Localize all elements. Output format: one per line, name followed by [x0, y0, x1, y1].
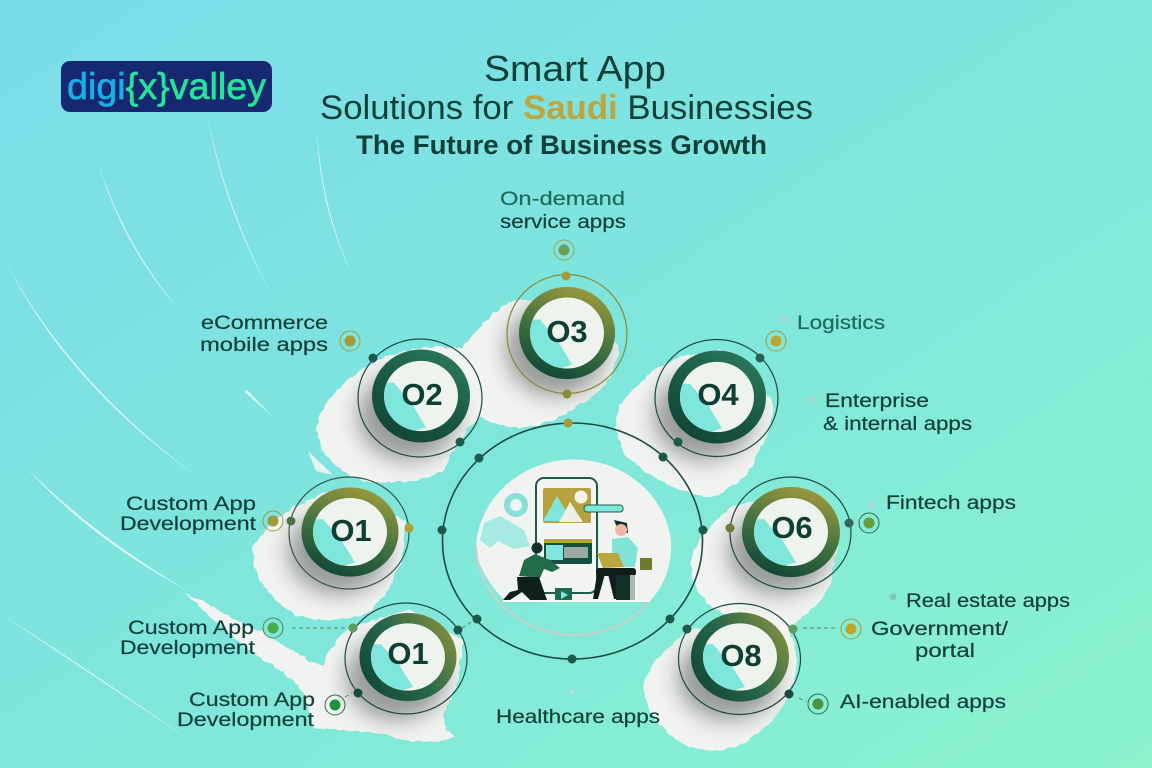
label: custom app development upper: Development: [120, 514, 257, 535]
node 06: [726, 477, 854, 589]
label: eCommerce mobile apps: eCommerce: [201, 313, 328, 334]
node 08: O8: [720, 638, 762, 673]
central illustration: app team: [476, 459, 671, 635]
label: enterprise and internal apps: Enterprise: [825, 391, 929, 412]
label: government portal: Government/: [871, 619, 1009, 640]
label: custom app development middle: Development: [120, 638, 256, 659]
label: logistics: [766, 313, 885, 351]
label: custom app development lower: Custom App: [189, 690, 315, 711]
logo: digi{x}valley: digi{x}valley: [67, 66, 267, 107]
title: [320, 48, 813, 160]
label: eCommerce mobile apps: [200, 313, 360, 356]
label: enterprise and internal apps: [808, 391, 972, 435]
label: eCommerce mobile apps: mobile apps: [200, 335, 328, 356]
node 04: O4: [697, 377, 739, 412]
label: custom app development lower: Development: [177, 710, 315, 731]
label: real estate apps: Real estate apps: [906, 591, 1070, 612]
node 06: O6: [771, 510, 813, 545]
node 04: [655, 340, 778, 456]
label: custom app development middle: [120, 618, 283, 659]
label: healthcare apps: Healthcare apps: [496, 707, 660, 728]
white brush blobs: [185, 300, 838, 750]
label: fintech apps: [859, 493, 1016, 533]
label: logistics: Logistics: [797, 313, 885, 334]
node 02: [358, 339, 482, 457]
icon: video button: [555, 588, 572, 601]
label: fintech apps: Fintech apps: [886, 493, 1016, 514]
phone: [536, 478, 623, 593]
node 01 upper: [286, 477, 414, 589]
label: custom app development lower: [177, 690, 345, 731]
label: custom app development upper: Custom App: [126, 494, 256, 515]
decorative brush streaks: [3, 113, 353, 740]
node 01 lower: [345, 603, 467, 714]
soft shadows under the nodes: [288, 304, 828, 720]
connector lines: [292, 621, 835, 702]
title: Solutions for Saudi Businessies: [320, 89, 813, 127]
label: custom app development middle: Custom App: [128, 618, 254, 639]
label: custom app development upper: [120, 494, 283, 535]
label: government portal: [841, 619, 1009, 662]
node 01 lower: O1: [387, 636, 429, 671]
node 03: [507, 272, 627, 398]
label: enterprise and internal apps: & internal apps: [823, 414, 972, 435]
node 02: O2: [401, 377, 443, 412]
node 01 upper: O1: [330, 513, 372, 548]
label: healthcare apps: [496, 690, 660, 728]
label: on-demand service apps: [500, 189, 626, 260]
label: government portal: portal: [915, 641, 975, 662]
node 03: O3: [546, 314, 588, 349]
label: AI-enabled apps: [808, 692, 1006, 714]
person kneeling: [503, 542, 560, 600]
node 08: [678, 604, 800, 714]
label: on-demand service apps: On-demand: [500, 189, 625, 210]
title: Smart App: [484, 48, 666, 89]
icon: gear: [507, 496, 525, 514]
title: The Future of Business Growth: [356, 130, 767, 160]
label: AI-enabled apps: AI-enabled apps: [840, 692, 1006, 713]
person sitting with laptop: [593, 520, 652, 600]
central ring: [438, 418, 708, 664]
label: on-demand service apps: service apps: [500, 212, 626, 233]
